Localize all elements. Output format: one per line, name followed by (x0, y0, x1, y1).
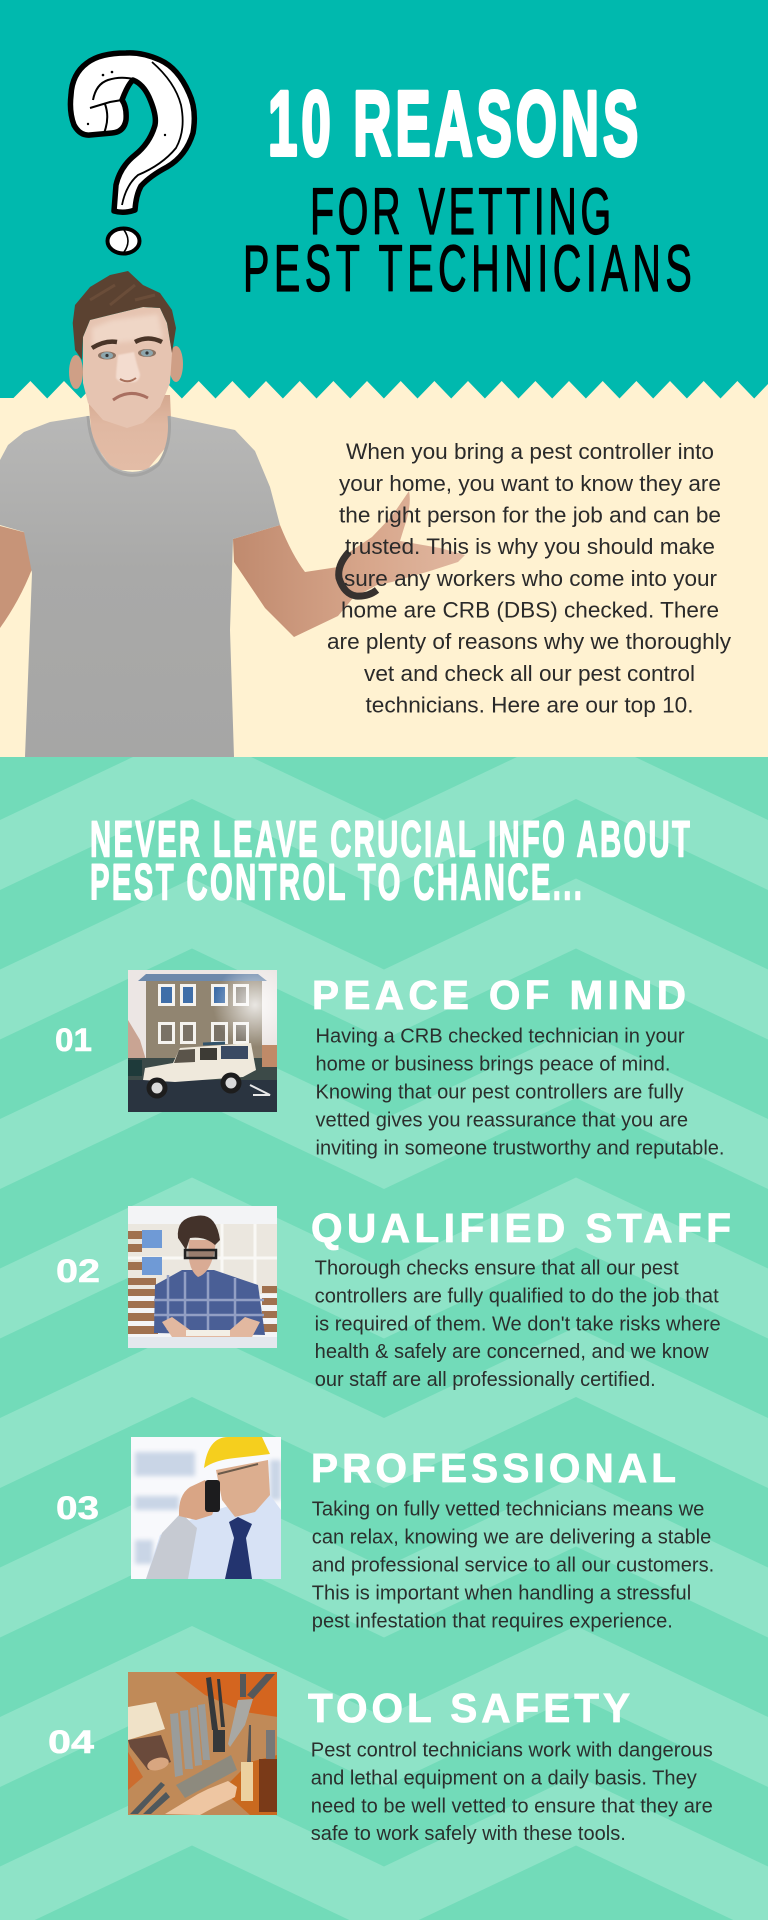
illustration: shrugging man (0, 271, 465, 757)
text: professional body: pest infestation that requires experience. (312, 1610, 673, 1632)
number 02: 02 (56, 1253, 100, 1289)
text: professional body (312, 1498, 714, 1632)
man: t-shirt (0, 416, 280, 757)
photo: engineer with hard hat on phone (131, 1437, 281, 1579)
text: qualified staff body: is required of them. We don't take risks where (315, 1314, 721, 1336)
text: peace of mind body (316, 1026, 724, 1160)
man: mouth (113, 393, 148, 400)
text block: intro paragraph: When you bring a pest controller into (346, 439, 714, 464)
heading: professional: PROFESSIONAL (311, 1445, 676, 1491)
number 01: 01 (55, 1022, 92, 1058)
title (243, 72, 692, 306)
number 04: 04 (48, 1724, 94, 1760)
man: right arm and hand (233, 491, 465, 637)
photo: leather tools (128, 1672, 278, 1815)
man: ears (69, 346, 183, 389)
title: 10 REASONS (268, 72, 638, 175)
text: tool safety body (311, 1740, 713, 1845)
heading: tool safety: TOOL SAFETY (308, 1685, 630, 1731)
heading: peace of mind: PEACE OF MIND (312, 972, 686, 1018)
text block: intro paragraph (327, 439, 732, 718)
text: peace of mind body: vetted gives you reassurance that you are (316, 1110, 688, 1132)
text: tool safety body: safe to work safely with these tools. (311, 1823, 626, 1845)
man: nostrils (120, 378, 136, 381)
reason 02: qualified staff (56, 1205, 731, 1391)
heading: never leave crucial info: PEST CONTROL TO CHANCE... (90, 853, 582, 911)
text: qualified staff body (315, 1258, 721, 1391)
text: tool safety body: need to be well vetted to ensure that they are (311, 1796, 713, 1818)
panel: mint chevron background (0, 729, 768, 1920)
photo: man reading among books (128, 1206, 277, 1348)
reason 03: professional (56, 1437, 714, 1632)
text: peace of mind body: Knowing that our pest controllers are fully (316, 1082, 684, 1104)
number 03: 03 (56, 1490, 99, 1526)
man: neck (88, 395, 172, 470)
man: left arm (0, 526, 32, 628)
text block: intro paragraph: technicians. Here are our top 10. (366, 692, 694, 718)
man: t-shirt collar (88, 416, 170, 475)
man: watch (339, 552, 377, 596)
photo: house and white jeep (128, 970, 277, 1112)
man: face (83, 307, 172, 428)
text block: intro paragraph: sure any workers who come into your (344, 566, 718, 591)
text block: intro paragraph: are plenty of reasons why we thoroughly (327, 629, 732, 654)
text: professional body: and professional service to all our customers. (312, 1554, 714, 1576)
text: peace of mind body: home or business brings peace of mind. (316, 1054, 670, 1076)
text: qualified staff body: our staff are all professionally certified. (315, 1369, 656, 1391)
heading: never leave crucial info: NEVER LEAVE CRUCIAL INFO ABOUT (90, 810, 690, 868)
text block: intro paragraph: home are CRB (DBS) checked. There (341, 598, 719, 622)
text: qualified staff body: Thorough checks ensure that all our pest (315, 1258, 679, 1280)
man: eyes (98, 349, 156, 360)
text: peace of mind body: Having a CRB checked technician in your (316, 1026, 685, 1048)
text block: intro paragraph: the right person for the job and can be (339, 502, 721, 528)
heading: qualified staff: QUALIFIED STAFF (311, 1205, 731, 1251)
man: eyebrows (92, 338, 162, 348)
text block: intro paragraph: vet and check all our pest control (364, 661, 695, 686)
panel: cream intro background with zigzag edge (0, 381, 768, 757)
text block: intro paragraph: your home, you want to know they are (339, 471, 721, 496)
man: nose (116, 352, 140, 382)
reason 01: peace of mind (55, 963, 724, 1160)
text block: intro paragraph: trusted. This is why you should make (345, 534, 715, 559)
heading: never leave crucial info (90, 810, 690, 911)
text: professional body: This is important when handling a stressful (312, 1582, 691, 1604)
title: FOR VETTING (310, 175, 611, 249)
title: PEST TECHNICIANS (243, 232, 692, 306)
text: peace of mind body: inviting in someone trustworthy and reputable. (316, 1138, 724, 1160)
text: professional body: can relax, knowing we are delivering a stable (312, 1526, 711, 1548)
text: qualified staff body: controllers are fully qualified to do the job that (315, 1286, 719, 1308)
man: hair (73, 271, 176, 360)
text: professional body: Taking on fully vetted technicians means we (312, 1498, 704, 1520)
text: tool safety body: and lethal equipment on a daily basis. They (311, 1768, 697, 1790)
man: forehead highlight (92, 314, 163, 345)
text: tool safety body: Pest control technicians work with dangerous (311, 1740, 713, 1762)
text: qualified staff body: health & safely are concerned, and we know (315, 1341, 709, 1363)
reason 04: tool safety (48, 1672, 713, 1845)
icon: hand-drawn question mark (70, 53, 194, 254)
man: hair highlights (90, 285, 155, 305)
panel: teal header background (0, 0, 768, 400)
